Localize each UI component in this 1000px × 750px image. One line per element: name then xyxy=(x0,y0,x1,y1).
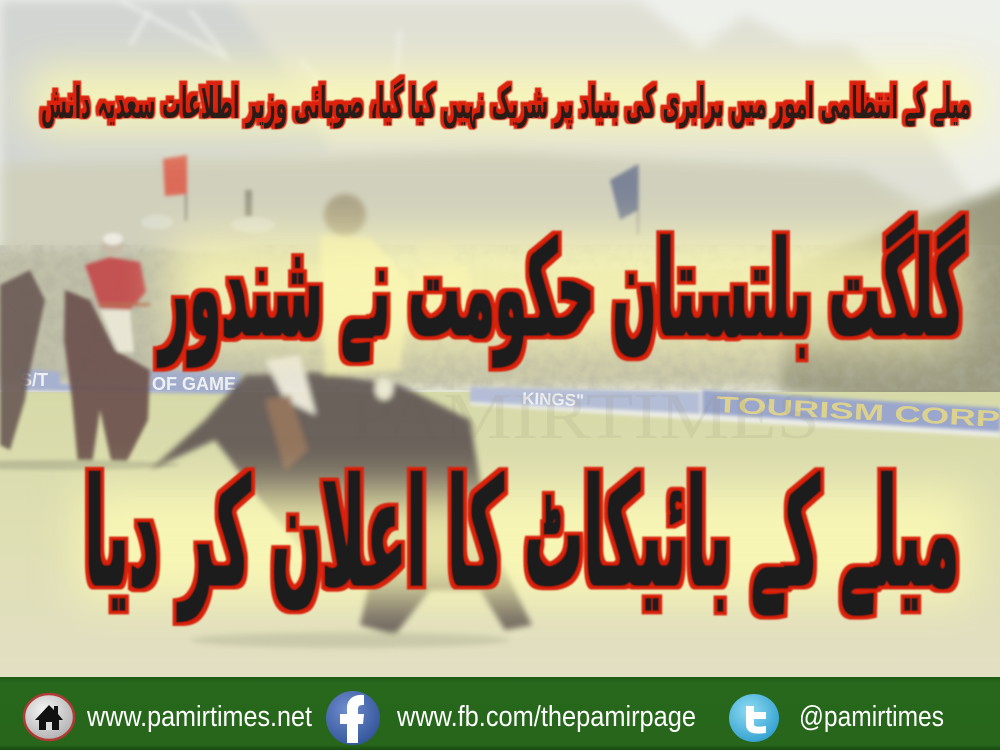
banner wording xyxy=(20,370,1000,432)
twitter handle: @pamirtimes xyxy=(799,701,944,733)
left horses and riders xyxy=(0,233,180,470)
banner wording: OF GAME xyxy=(152,374,236,394)
centre horse and rider xyxy=(150,194,532,648)
banner wording: S/T xyxy=(20,370,48,390)
banners xyxy=(20,368,1000,437)
website address: www.pamirtimes.net xyxy=(86,701,312,733)
icon: home xyxy=(24,694,74,740)
mountain snow streaks xyxy=(120,0,400,110)
flags xyxy=(163,155,639,235)
icon: facebook xyxy=(326,691,380,745)
footer band xyxy=(0,677,1000,750)
facebook address: www.fb.com/thepamirpage xyxy=(396,701,696,733)
icon: twitter xyxy=(729,694,779,742)
crowd xyxy=(0,180,1000,420)
yellow text glow xyxy=(30,70,980,600)
rocks xyxy=(141,215,275,252)
banner wording: KINGS" xyxy=(522,389,584,410)
banner wording: TOURISM CORP xyxy=(716,391,1000,432)
watermark: PAMIRTIMES xyxy=(350,380,820,453)
grass field xyxy=(0,392,1000,682)
mountains xyxy=(0,0,1000,270)
